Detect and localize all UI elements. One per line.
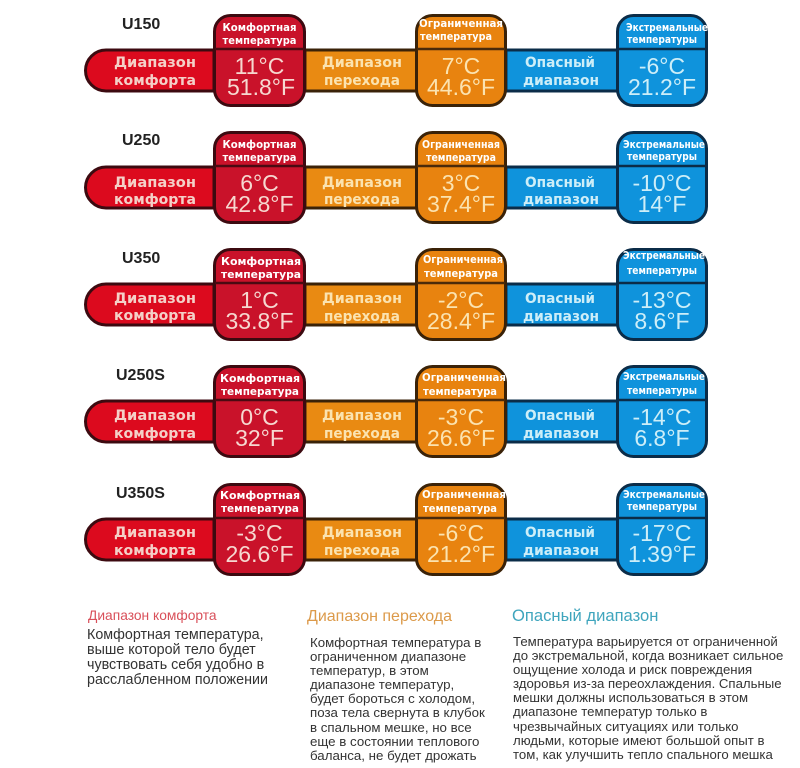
box: extreme temperature: Экстремальные: [626, 22, 708, 34]
model name: U350: [122, 250, 160, 267]
bar: comfort range: комфорта: [114, 308, 196, 324]
box: extreme temperature: температуры: [627, 151, 697, 163]
box: comfort temperature: 42.8°F: [225, 191, 294, 217]
text: danger description: людьми, которые имеют большой опыт в: [513, 733, 764, 748]
text: danger description: Температура варьируется от ограниченной: [513, 634, 778, 649]
heading: transition range: Диапазон перехода: [307, 608, 452, 625]
bar: comfort range: комфорта: [114, 192, 196, 208]
bar: transition range: перехода: [324, 73, 400, 89]
bar: danger range: Опасный: [525, 175, 595, 191]
box: limit temperature: 7°C: [442, 53, 480, 79]
bar: comfort range: [86, 519, 214, 560]
text: danger description: мешки должны использоваться в этом: [513, 690, 748, 705]
box: comfort temperature: [214, 132, 304, 222]
box: extreme temperature: 14°F: [638, 191, 686, 217]
box: comfort temperature: -3°C: [236, 520, 283, 546]
box: extreme temperature: [618, 16, 708, 106]
box: comfort temperature: 51.8°F: [227, 74, 295, 100]
bar: comfort range: комфорта: [114, 543, 196, 559]
text: comfort description: [87, 627, 268, 688]
box: comfort temperature: температура: [221, 269, 301, 281]
bar: transition range: перехода: [324, 426, 400, 442]
box: comfort temperature: температура: [222, 152, 296, 164]
text: danger description: чрезвычайных ситуациях или только: [513, 719, 738, 734]
box: limit temperature: 44.6°F: [427, 74, 495, 100]
row: U150: [86, 16, 708, 106]
row: U250S: [86, 366, 706, 456]
text: comfort description: расслабленном положении: [87, 672, 268, 688]
box: limit temperature: -3°C: [438, 404, 484, 430]
box: extreme temperature: температуры: [627, 385, 697, 397]
text: danger description: том, как улучшить тепло спального мешка: [513, 747, 773, 762]
text: transition description: будет бороться с холодом,: [310, 691, 475, 706]
bar: transition range: Диапазон: [322, 175, 402, 191]
text: transition description: баланса, не будет дрожать: [310, 748, 477, 763]
bar: danger range: [506, 401, 618, 442]
box: extreme temperature: 8.6°F: [634, 308, 690, 334]
bar: transition range: перехода: [324, 309, 400, 325]
text: danger description: ощущение холода и риск повреждения: [513, 662, 752, 677]
text: danger description: до экстремальной, когда возникает сильное: [513, 648, 783, 663]
text: transition description: в спальном мешке, но все: [310, 720, 472, 735]
bar: transition range: перехода: [324, 543, 400, 559]
bar: comfort range: [86, 167, 214, 208]
bar: danger range: Опасный: [525, 408, 595, 424]
box: limit temperature: 21.2°F: [427, 541, 495, 567]
box: limit temperature: температура: [424, 268, 498, 280]
heading: danger range: Опасный диапазон: [512, 606, 658, 625]
box: extreme temperature: -17°C: [632, 520, 692, 546]
text: comfort description: чувствовать себя удобно в: [87, 657, 264, 673]
row: U250: [86, 132, 706, 222]
model name: U350S: [116, 485, 165, 502]
box: limit temperature: температура: [423, 503, 497, 515]
box: comfort temperature: температура: [222, 35, 296, 47]
bar: comfort range: комфорта: [114, 426, 196, 442]
bar: comfort range: Диапазон: [114, 525, 196, 541]
box: extreme temperature: [618, 250, 706, 340]
box: extreme temperature: 21.2°F: [628, 74, 696, 100]
text: comfort description: Комфортная температура,: [87, 627, 264, 643]
box: extreme temperature: 6.8°F: [634, 425, 690, 451]
bar: comfort range: [86, 50, 214, 91]
box: comfort temperature: [214, 484, 304, 574]
box: comfort temperature: температура: [221, 503, 299, 515]
bar: comfort range: комфорта: [114, 73, 196, 89]
box: comfort temperature: Комфортная: [220, 373, 300, 385]
box: limit temperature: Ограниченная: [422, 372, 506, 384]
box: extreme temperature: 1.39°F: [628, 541, 696, 567]
box: limit temperature: Ограниченная: [422, 489, 506, 501]
box: comfort temperature: 11°C: [235, 53, 284, 79]
box: extreme temperature: Экстремальные: [623, 139, 705, 151]
text: transition description: ограниченном диапазоне: [310, 649, 466, 664]
box: comfort temperature: 1°C: [240, 287, 279, 313]
bar: transition range: [305, 401, 417, 442]
box: comfort temperature: [214, 16, 304, 106]
model name: U250: [122, 132, 160, 149]
box: comfort temperature: 32°F: [235, 425, 284, 451]
box: extreme temperature: [618, 132, 706, 222]
box: comfort temperature: 0°C: [240, 404, 279, 430]
bar: transition range: [305, 284, 417, 325]
box: limit temperature: [416, 16, 506, 106]
box: extreme temperature: [618, 366, 706, 456]
text: danger description: [513, 634, 783, 762]
box: limit temperature: температура: [426, 152, 496, 164]
box: comfort temperature: 26.6°F: [225, 541, 294, 567]
box: comfort temperature: температура: [221, 386, 299, 398]
box: extreme temperature: температуры: [627, 34, 697, 46]
bar: danger range: диапазон: [523, 543, 599, 559]
bar: danger range: диапазон: [523, 309, 599, 325]
box: limit temperature: -6°C: [438, 520, 484, 546]
box: limit temperature: [416, 366, 506, 456]
box: limit temperature: температура: [423, 386, 497, 398]
row: U350: [86, 250, 706, 340]
bar: danger range: Опасный: [525, 55, 595, 71]
bar: comfort range: Диапазон: [114, 175, 196, 191]
box: extreme temperature: температуры: [627, 501, 697, 513]
box: comfort temperature: Комфортная: [222, 139, 296, 151]
box: limit temperature: 26.6°F: [427, 425, 495, 451]
box: limit temperature: Ограниченная: [423, 254, 503, 266]
bar: danger range: диапазон: [523, 426, 599, 442]
bar: transition range: [305, 50, 417, 91]
text: transition description: температур, в этом: [310, 663, 429, 678]
box: extreme temperature: Экстремальные: [623, 371, 705, 383]
box: limit temperature: 28.4°F: [427, 308, 495, 334]
bar: transition range: [305, 519, 417, 560]
text: transition description: Комфортная температура в: [310, 635, 481, 650]
box: comfort temperature: [214, 366, 304, 456]
bar: comfort range: Диапазон: [114, 408, 196, 424]
box: comfort temperature: Комфортная: [221, 256, 301, 268]
box: extreme temperature: -10°C: [632, 170, 692, 196]
box: comfort temperature: [214, 250, 304, 340]
box: extreme temperature: -6°C: [639, 53, 685, 79]
bar: danger range: диапазон: [523, 192, 599, 208]
bar: danger range: Опасный: [525, 291, 595, 307]
box: extreme temperature: -13°C: [632, 287, 692, 313]
text: danger description: диапазоне температур только в: [513, 704, 707, 719]
box: limit temperature: [416, 484, 506, 574]
box: limit temperature: [416, 250, 506, 340]
bar: comfort range: Диапазон: [114, 55, 196, 71]
text: danger description: здоровья из-за переохлаждения. Спальные: [513, 676, 782, 691]
bar: comfort range: [86, 401, 214, 442]
bar: danger range: [506, 284, 618, 325]
box: limit temperature: [416, 132, 506, 222]
box: extreme temperature: температуры: [627, 265, 697, 277]
bar: transition range: Диапазон: [322, 525, 402, 541]
box: comfort temperature: 6°C: [240, 170, 279, 196]
box: limit temperature: Ограниченная: [422, 139, 500, 151]
text: comfort description: выше которой тело будет: [87, 642, 256, 658]
box: extreme temperature: Экстремальные: [623, 489, 705, 501]
box: limit temperature: температура: [420, 31, 492, 43]
text: transition description: диапазоне температур,: [310, 677, 454, 692]
bar: danger range: [506, 519, 618, 560]
box: limit temperature: Ограниченная: [419, 18, 503, 30]
bar: danger range: Опасный: [525, 525, 595, 541]
bar: danger range: [506, 50, 618, 91]
text: transition description: еще в состоянии теплового: [310, 734, 479, 749]
box: comfort temperature: Комфортная: [222, 22, 296, 34]
box: limit temperature: -2°C: [438, 287, 484, 313]
bar: danger range: диапазон: [523, 73, 599, 89]
bar: danger range: [506, 167, 618, 208]
bar: comfort range: [86, 284, 214, 325]
box: comfort temperature: 33.8°F: [225, 308, 294, 334]
bar: transition range: Диапазон: [322, 408, 402, 424]
box: comfort temperature: Комфортная: [220, 490, 300, 502]
bar: transition range: [305, 167, 417, 208]
bar: transition range: Диапазон: [322, 55, 402, 71]
heading: comfort range: Диапазон комфорта: [88, 608, 217, 623]
model name: U150: [122, 16, 160, 33]
box: extreme temperature: Экстремальные: [623, 250, 705, 262]
box: limit temperature: 37.4°F: [427, 191, 495, 217]
text: transition description: [310, 635, 485, 763]
bar: transition range: Диапазон: [322, 291, 402, 307]
text: transition description: поза тела свернута в клубок: [310, 705, 485, 720]
box: extreme temperature: [618, 484, 706, 574]
box: extreme temperature: -14°C: [632, 404, 692, 430]
bar: comfort range: Диапазон: [114, 291, 196, 307]
model name: U250S: [116, 367, 165, 384]
row: U350S: [86, 484, 706, 574]
bar: transition range: перехода: [324, 192, 400, 208]
box: limit temperature: 3°C: [442, 170, 480, 196]
